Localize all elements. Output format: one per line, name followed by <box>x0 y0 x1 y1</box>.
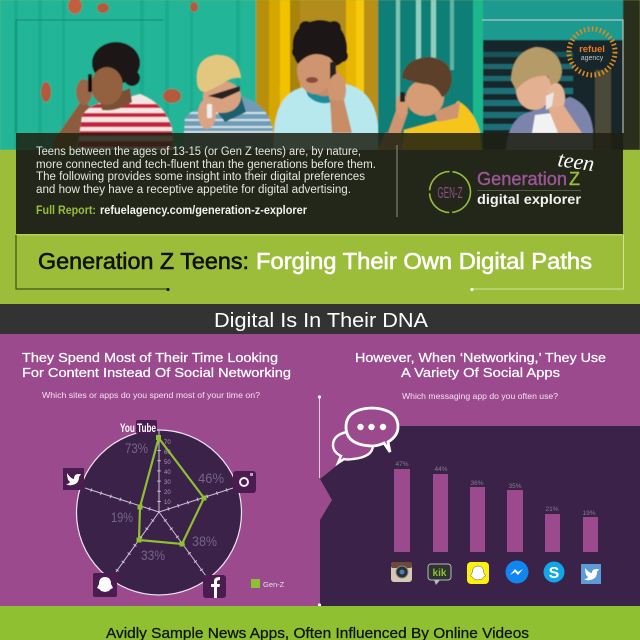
center timeline <box>318 395 321 607</box>
icon: skype <box>544 562 564 582</box>
right heading: However, When ‘Networking,’ They Use <box>355 350 606 365</box>
teen 2 <box>180 55 280 150</box>
axis labels: 10 <box>164 500 171 506</box>
percentage labels <box>111 440 224 563</box>
right heading <box>355 350 606 380</box>
logo: refuel agency <box>569 29 615 75</box>
percentage labels: 73% <box>125 440 148 456</box>
frame lines <box>16 20 163 133</box>
percentage labels: 38% <box>192 533 217 549</box>
logo: generation z digital explorer: teen <box>556 146 596 176</box>
full report link: refuelagency.com/generation-z-explorer <box>100 205 307 217</box>
legend: Gen-Z <box>263 580 285 589</box>
teen 4 <box>378 57 482 150</box>
icon: twitter app <box>581 564 601 584</box>
logo: refuel agency: refuel <box>579 44 605 55</box>
green background <box>0 150 640 304</box>
title: Forging Their Own Digital Paths <box>256 248 592 274</box>
axis labels: 20 <box>164 490 171 496</box>
teen 5 <box>506 47 593 150</box>
percentage labels: 46% <box>198 470 224 486</box>
bar values <box>395 461 596 517</box>
left question: Which sites or apps do you spend most of your time on? <box>42 390 260 400</box>
teen 3 <box>274 20 378 150</box>
panel: purple section <box>0 334 640 606</box>
icon: twitter <box>63 468 84 490</box>
logo: generation z digital explorer: Z <box>569 169 580 189</box>
icon: speech bubbles <box>333 408 398 463</box>
bar values: 21% <box>545 506 559 513</box>
icon: instagram <box>233 471 256 493</box>
percentage labels: 19% <box>111 509 133 525</box>
icon: instagram app <box>391 562 412 582</box>
bar values: 19% <box>582 510 596 517</box>
title: Generation Z Teens: <box>38 248 249 274</box>
icon: snapchat app <box>467 562 489 584</box>
bar chart: messaging apps <box>394 461 598 552</box>
logo: generation z digital explorer: Generation <box>477 169 567 189</box>
photo: teens on phones <box>0 0 640 150</box>
icon: youtube <box>120 420 157 435</box>
icon: snapchat <box>93 573 117 597</box>
icon: youtube: You Tube <box>120 421 156 435</box>
logo: generation z digital explorer: GEN-Z <box>438 185 463 202</box>
frame arrows <box>16 235 624 291</box>
axis labels: 60 <box>164 450 171 456</box>
right heading: A Variety Of Social Apps <box>401 365 561 380</box>
icon: kik <box>428 564 451 585</box>
teen 1 <box>52 42 180 150</box>
left heading: For Content Instead Of Social Networking <box>22 365 291 380</box>
axis labels: 50 <box>164 460 171 466</box>
full report link: Full Report: <box>36 205 96 217</box>
intro text: The following provides some insight into their digital preferences <box>36 171 365 183</box>
left heading <box>22 350 291 380</box>
bottom green band <box>0 606 640 640</box>
bar values: 36% <box>470 480 484 487</box>
legend <box>251 579 285 589</box>
intro text: Teens between the ages of 13-15 (or Gen Z teens) are, by nature, <box>36 146 361 158</box>
icon: skype: S <box>549 565 560 582</box>
bar values: 47% <box>395 461 409 468</box>
section band: Digital Is In Their DNA <box>0 304 640 334</box>
axis labels: 40 <box>164 470 171 476</box>
left heading: They Spend Most of Their Time Looking <box>22 350 278 365</box>
panel: messaging dark background <box>320 426 640 606</box>
axis labels <box>164 440 171 506</box>
icon: kik: kik <box>433 568 447 579</box>
axis labels: 30 <box>164 480 171 486</box>
intro text: and how they have a receptive appetite for digital advertising. <box>36 184 351 196</box>
gen-z series line <box>136 435 206 546</box>
right question: Which messaging app do you often use? <box>402 391 558 401</box>
icon: messenger <box>506 560 528 584</box>
radar chart <box>76 430 242 595</box>
axis labels: 70 <box>164 440 171 446</box>
logo: generation z digital explorer: digital explorer <box>477 191 582 207</box>
icon: facebook <box>203 575 226 598</box>
section band: Digital Is In Their DNA: Digital Is In Their DNA <box>214 310 429 332</box>
bar values: 44% <box>434 466 448 473</box>
intro text <box>36 146 376 196</box>
intro text: more connected and tech-fluent than the generations before them. <box>36 159 376 171</box>
logo: refuel agency: agency <box>581 55 604 62</box>
percentage labels: 33% <box>141 547 165 563</box>
title <box>38 248 592 274</box>
panel: intro <box>16 133 623 236</box>
logo: generation z digital explorer <box>430 146 596 212</box>
bar values: 35% <box>508 483 522 490</box>
